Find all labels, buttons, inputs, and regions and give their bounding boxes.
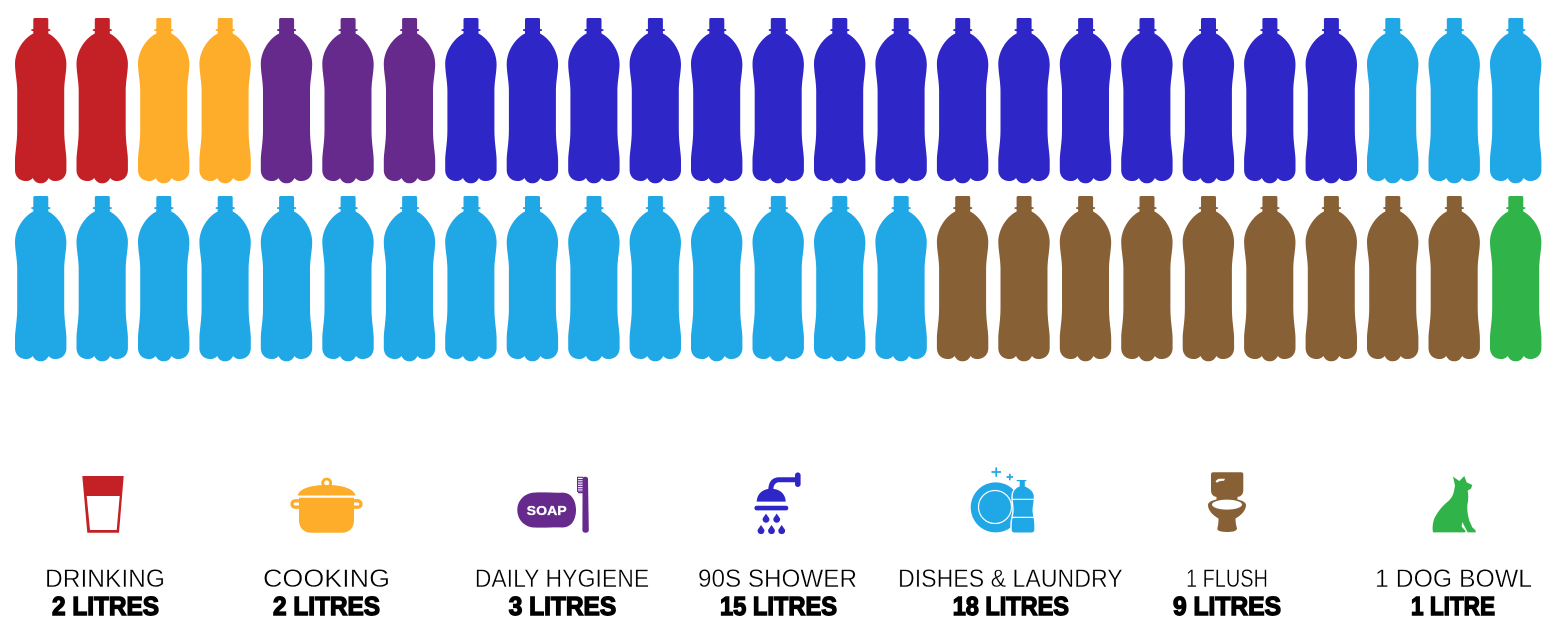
label: 1 dog bowl xyxy=(1375,565,1532,621)
bottles: cooking (2) xyxy=(138,18,251,183)
label: drinking: DRINKING xyxy=(45,565,165,593)
icon: plate and dish soap xyxy=(971,467,1035,533)
bottles: daily hygiene (3) xyxy=(261,18,435,183)
label: daily hygiene: DAILY HYGIENE xyxy=(475,565,649,593)
label: 1 flush: 1 FLUSH xyxy=(1186,565,1268,593)
label: 90s shower xyxy=(698,565,857,621)
label: drinking xyxy=(45,565,165,621)
label: drinking: 2 LITRES xyxy=(52,591,159,621)
icon: dog xyxy=(1433,476,1476,532)
icon: cooking pot xyxy=(292,479,361,533)
icon: glass xyxy=(82,476,124,533)
label: dishes and laundry: 18 LITRES xyxy=(953,591,1069,621)
label: cooking xyxy=(263,565,390,621)
label: cooking: 2 LITRES xyxy=(273,591,380,621)
label: 1 flush xyxy=(1173,565,1281,621)
label: daily hygiene: 3 LITRES xyxy=(509,591,616,621)
bottle: dog bowl (1) xyxy=(1490,196,1541,361)
icon: shower xyxy=(754,472,801,534)
bottles: 90s shower (15) xyxy=(445,18,1357,183)
label: dishes and laundry xyxy=(898,565,1123,621)
label: 1 dog bowl: 1 LITRE xyxy=(1411,591,1495,621)
label: 1 dog bowl: 1 DOG BOWL xyxy=(1375,565,1532,593)
bottles: drinking (2) xyxy=(15,18,128,183)
bottles: dishes and laundry (18) xyxy=(15,18,1541,361)
icon: soap and toothbrush: SOAP xyxy=(527,503,567,518)
label: dishes and laundry: DISHES & LAUNDRY xyxy=(898,565,1123,593)
icon: toilet xyxy=(1208,472,1246,532)
icon: soap and toothbrush xyxy=(517,477,589,533)
label: 90s shower: 15 LITRES xyxy=(720,591,837,621)
label: 90s shower: 90S SHOWER xyxy=(698,565,857,593)
label: 1 flush: 9 LITRES xyxy=(1173,591,1281,621)
label: daily hygiene xyxy=(475,565,649,621)
label: cooking: COOKING xyxy=(263,565,390,593)
bottles: flush (9) xyxy=(937,196,1480,361)
